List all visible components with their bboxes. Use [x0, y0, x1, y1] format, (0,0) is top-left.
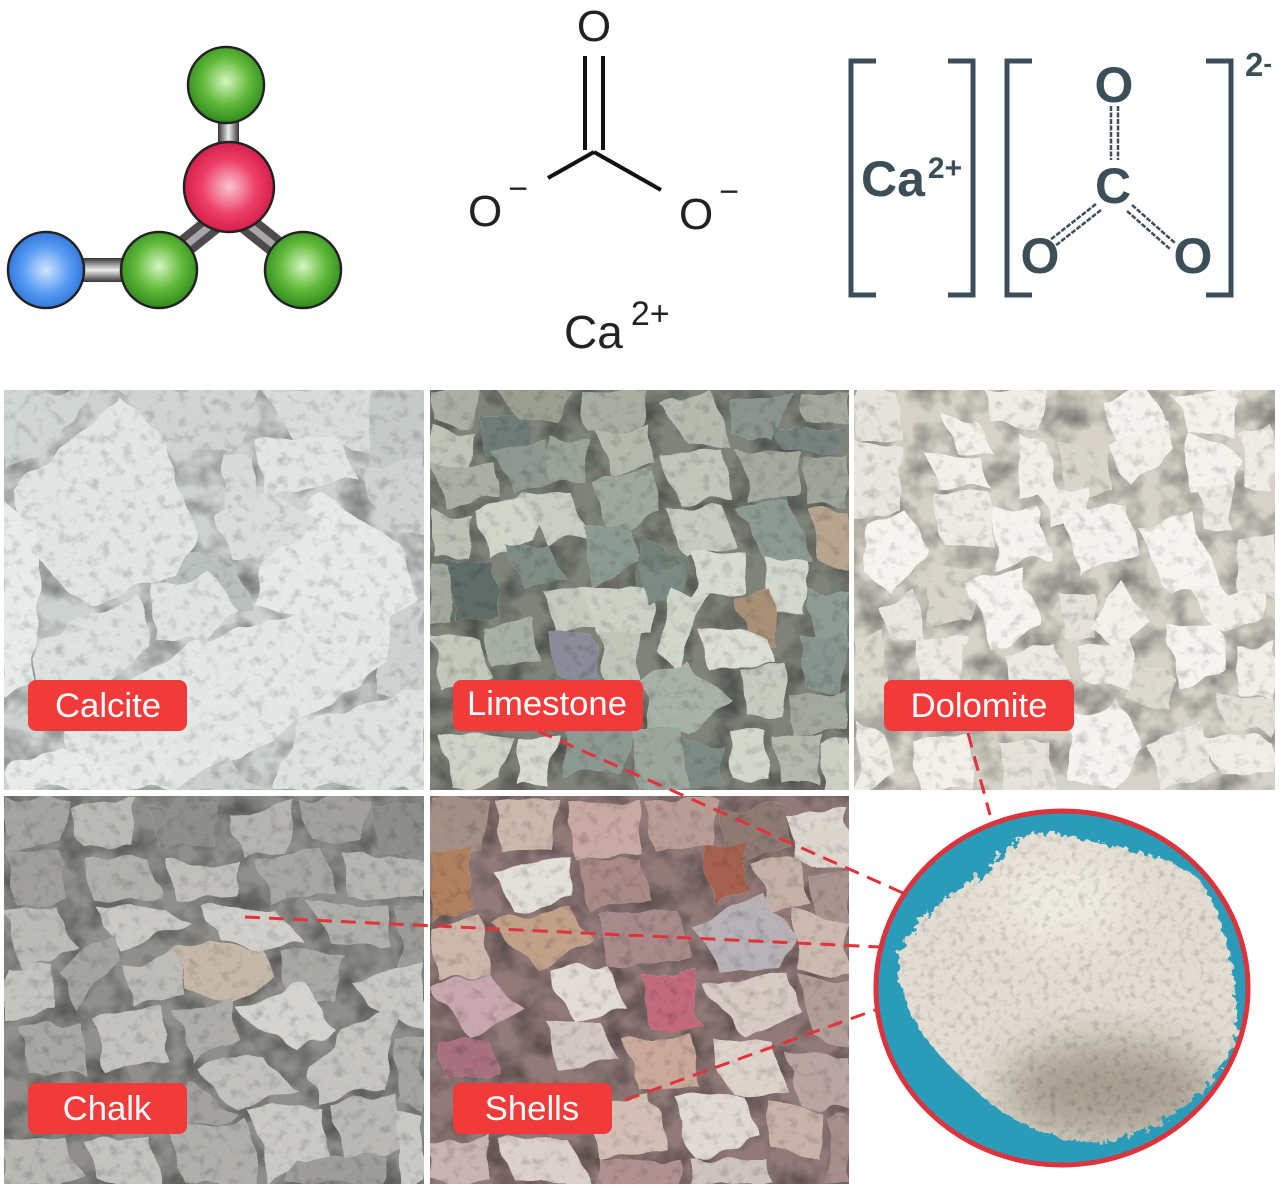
calcium ion: 2+: [631, 295, 670, 333]
left oxygen ion: O: [468, 187, 502, 236]
right oxygen: O: [1174, 228, 1212, 284]
bond highlight: lower right: [245, 222, 290, 258]
atom: blue: [8, 232, 84, 308]
label: Limestone: Limestone: [467, 685, 627, 723]
bond: lower left: [170, 222, 215, 258]
photo: calcite: [4, 390, 424, 790]
powder photo in circle: [876, 811, 1250, 1165]
label: Limestone: [453, 680, 643, 731]
red circle outline: [876, 811, 1248, 1165]
dashed connector: limestone to powder: [538, 731, 903, 893]
charge label: 2: [1245, 46, 1263, 83]
label: Chalk: Chalk: [63, 1090, 152, 1128]
label: Calcite: Calcite: [55, 687, 161, 725]
right oxygen ion: −: [719, 173, 739, 211]
atom: top green: [188, 47, 264, 123]
structural formula: carbonate with calcium: [468, 2, 739, 358]
charge label: -: [1263, 48, 1272, 78]
bond highlight: lower left: [170, 222, 215, 258]
photo: shells: [430, 796, 849, 1184]
dashed connector: dolomite to powder: [968, 733, 990, 815]
label: Chalk: [28, 1083, 187, 1134]
label: Dolomite: Dolomite: [911, 687, 1047, 725]
label: Shells: Shells: [485, 1090, 579, 1128]
left oxygen ion: −: [508, 170, 528, 208]
calcium ion: Ca: [564, 306, 623, 358]
double bonds: [1050, 106, 1175, 249]
left oxygen: O: [1021, 228, 1059, 284]
label: Shells: [453, 1083, 612, 1134]
label: Calcite: [28, 680, 187, 731]
brackets: [851, 61, 1231, 295]
top oxygen: O: [577, 2, 611, 51]
blue background: [876, 811, 1248, 1165]
label: Dolomite: [884, 680, 1074, 731]
powder pile: [896, 830, 1240, 1145]
calcium ion label: 2+: [928, 152, 962, 185]
carbon: C: [1095, 158, 1131, 214]
atom: center red: [184, 142, 274, 232]
photo: chalk: [4, 796, 424, 1184]
calcium ion label: Ca: [861, 151, 925, 207]
bond: top: [218, 115, 239, 155]
photo: dolomite: [854, 390, 1275, 790]
photo: limestone: [430, 390, 849, 790]
carbonate bonds: [548, 56, 661, 190]
molecule ball-and-stick model: [8, 47, 341, 308]
top oxygen: O: [1095, 57, 1133, 113]
dashed connector: shells to powder: [625, 1010, 875, 1100]
right oxygen ion: O: [679, 190, 713, 239]
ionic formula in brackets: [851, 46, 1272, 295]
atom: lower left green: [121, 232, 197, 308]
atom: lower right green: [265, 232, 341, 308]
bond: left: [80, 258, 130, 282]
dashed connector: chalk to powder: [245, 917, 880, 947]
bond: lower right: [245, 222, 290, 258]
